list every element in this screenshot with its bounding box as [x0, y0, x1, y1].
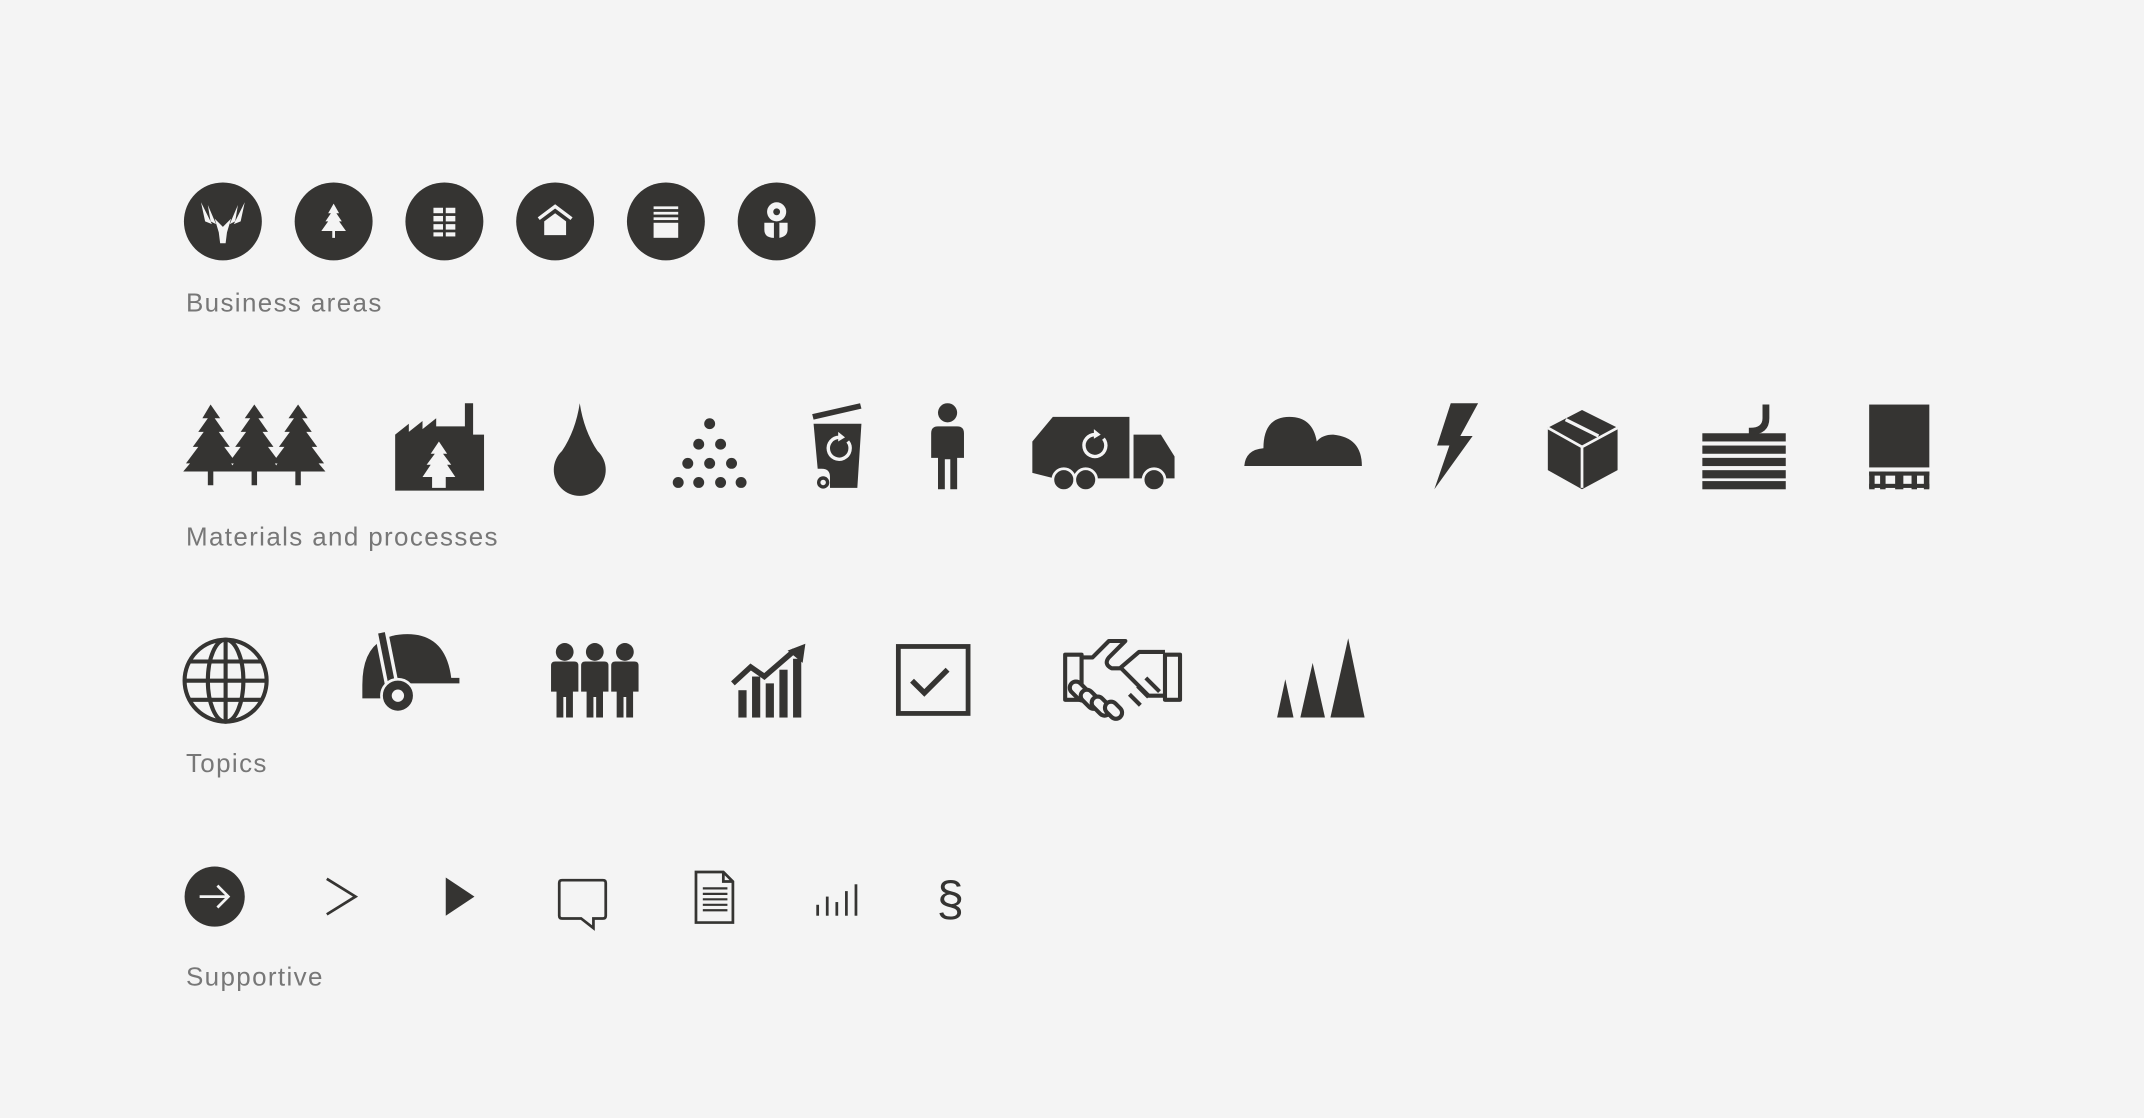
label: supportive: Supportive	[186, 961, 324, 991]
icon: handshake	[1065, 641, 1180, 721]
icon: small bar chart	[816, 884, 857, 916]
icon: factory	[395, 403, 484, 491]
icon: grid	[405, 182, 483, 260]
icon: drop	[554, 403, 606, 496]
icon: helmet	[362, 633, 459, 712]
icon: box	[1548, 410, 1618, 489]
icon: moose	[184, 182, 262, 260]
icon: chevron	[327, 879, 356, 914]
row: supportive icons	[185, 867, 964, 928]
icon: checkbox	[898, 646, 968, 713]
row: topics icons	[185, 633, 1365, 722]
icon: peaks	[1277, 638, 1365, 718]
icon: forest	[183, 405, 325, 485]
icon: document	[696, 872, 733, 923]
icon: speech bubble	[559, 880, 606, 928]
icon: person	[931, 403, 964, 489]
icon: sheets	[1702, 406, 1786, 489]
icon: section sign: §	[937, 872, 964, 927]
label: business areas: Business areas	[186, 288, 383, 318]
icon: play	[446, 877, 474, 916]
icon: dots	[673, 418, 747, 488]
icon: recycle bin	[812, 403, 861, 489]
row: business areas icons	[184, 182, 816, 260]
label: materials and processes: Materials and processes	[186, 521, 499, 551]
label: topics: Topics	[186, 748, 268, 778]
icon: lightning	[1434, 403, 1478, 489]
icon: people	[551, 643, 639, 718]
icon: tree	[295, 182, 373, 260]
icon: pallet	[1869, 405, 1929, 489]
icon: arrow circle	[185, 867, 245, 927]
icon: growth chart	[733, 644, 805, 718]
icon: paper stack	[627, 182, 705, 260]
icon: globe	[185, 640, 267, 722]
icon: cloud	[1244, 417, 1362, 466]
row: materials and processes icons	[183, 403, 1929, 496]
icon: truck	[1032, 417, 1175, 491]
icon: tissue roll	[738, 182, 816, 260]
icon: house	[516, 182, 594, 260]
